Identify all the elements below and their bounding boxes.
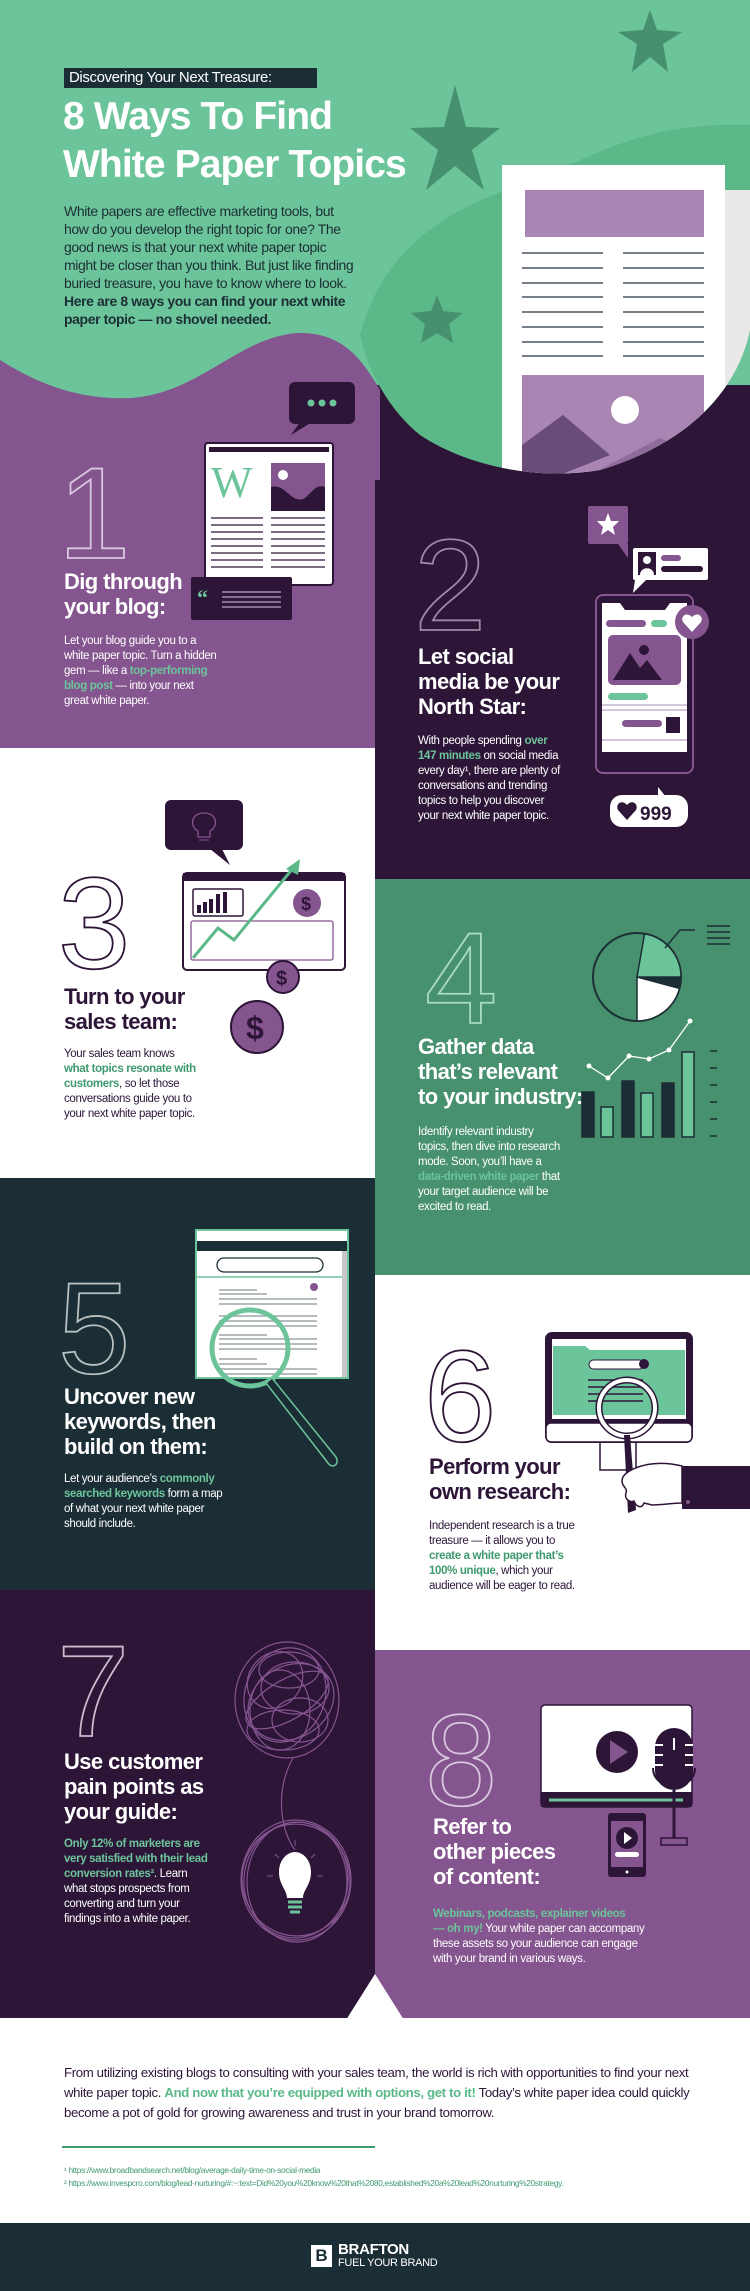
body 7 — [64, 1838, 208, 1925]
body 1: great white paper. — [64, 695, 149, 707]
illustration: blog page: W — [211, 458, 253, 507]
heading 4: that’s relevant — [418, 1059, 557, 1084]
footnotes: ¹ https://www.broadbandsearch.net/blog/average-daily-time-on-social-media — [64, 2165, 320, 2175]
body 7: conversion rates². Learn — [64, 1868, 187, 1880]
body 8: — oh my! Your white paper can accompany — [433, 1923, 644, 1935]
divider triangle — [347, 1974, 403, 2018]
body 4: mode. Soon, you’ll have a — [418, 1156, 542, 1168]
body 2: 147 minutes on social media — [418, 750, 558, 762]
intro text — [64, 203, 353, 327]
heading 1: Dig through — [64, 569, 182, 594]
heading 2: Let social — [418, 644, 513, 669]
body 7: converting and turn your — [64, 1898, 180, 1910]
body 6: 100% unique, which your — [429, 1565, 553, 1577]
heading 7: Use customer — [64, 1749, 202, 1774]
body 4: topics, then dive into research — [418, 1141, 560, 1153]
illustration: sales chart and coins — [165, 800, 346, 1054]
heading 5: build on them: — [64, 1434, 207, 1459]
body 7: findings into a white paper. — [64, 1913, 190, 1925]
body 7: very satisfied with their lead — [64, 1853, 208, 1865]
panel 6 background — [375, 1275, 750, 1650]
body 2: conversations and trending — [418, 780, 547, 792]
heading 3: Turn to your — [64, 984, 185, 1009]
logo: FUEL YOUR BRAND — [338, 2257, 437, 2269]
heading 3: sales team: — [64, 1009, 177, 1034]
body 1 — [64, 635, 216, 707]
panel 4 background — [375, 879, 750, 1275]
panel 3 background — [0, 748, 375, 1178]
heading 5: Uncover new — [64, 1384, 194, 1409]
heading 2 — [418, 644, 560, 719]
body 5: searched keywords form a map — [64, 1488, 222, 1500]
heading 1 — [64, 569, 182, 619]
heading 8: other pieces — [433, 1839, 555, 1864]
heading 4: to your industry: — [418, 1084, 583, 1109]
body 6: audience will be eager to read. — [429, 1580, 575, 1592]
intro text: White papers are effective marketing tools, but — [64, 203, 334, 219]
body 4: your target audience will be — [418, 1186, 548, 1198]
heading 7: pain points as — [64, 1774, 204, 1799]
star small — [411, 295, 463, 343]
illustration: sales chart and coins: $ — [246, 1010, 264, 1046]
body 3: Your sales team knows — [64, 1048, 174, 1060]
conclusion text: From utilizing existing blogs to consulting with your sales team, the world is rich with opportunities to find your next white paper topic. And now that you’re equipped with options, get to it! Today’s white paper idea could quickly become a pot of gold for growing awareness and trust in your brand tomorrow. — [64, 2065, 689, 2120]
illustration: blog page — [191, 382, 355, 620]
heading 7 — [64, 1749, 204, 1824]
body 8 — [433, 1908, 645, 1965]
heading 5: keywords, then — [64, 1409, 216, 1434]
title — [63, 95, 406, 186]
logo: BRAFTON — [338, 2241, 409, 2258]
star top right — [618, 10, 682, 72]
body 3: what topics resonate with — [64, 1063, 196, 1075]
body 8: Webinars, podcasts, explainer videos — [433, 1908, 625, 1920]
heading 6: Perform your — [429, 1454, 560, 1479]
heading 7: your guide: — [64, 1799, 177, 1824]
intro text: good news is that your next white paper topic — [64, 239, 326, 255]
body 1: Let your blog guide you to a — [64, 635, 196, 647]
panel 1 background — [0, 330, 375, 748]
body 3: customers, so let those — [64, 1078, 179, 1090]
hero background with waves, stars and paper — [0, 0, 750, 480]
body 4: excited to read. — [418, 1201, 491, 1213]
illustration: charts — [581, 925, 730, 1138]
logo — [311, 2241, 438, 2269]
body 1: gem — like a top-performing — [64, 665, 207, 677]
heading 2: North Star: — [418, 694, 526, 719]
body 1: blog post — into your next — [64, 680, 194, 692]
body 8: with your brand in various ways. — [433, 1953, 585, 1965]
tag line: Discovering Your Next Treasure: — [69, 69, 272, 86]
intro text: Here are 8 ways you can find your next white — [64, 293, 345, 309]
heading 8 — [433, 1814, 556, 1889]
body 3 — [64, 1048, 196, 1120]
footnotes: ² https://www.invespcro.com/blog/lead-nurturing/#:~:text=Did%20you%20know%20that%2080,established%20a%20lead%20nurturing%20strategy. — [64, 2178, 563, 2188]
title: White Paper Topics — [63, 143, 406, 186]
panel 8 background — [375, 1650, 750, 2018]
illustration: browser and magnifier — [195, 1229, 349, 1467]
body 3: conversations guide you to — [64, 1093, 192, 1105]
illustration: social phone: 999 — [640, 804, 672, 825]
body 2: topics to help you discover — [418, 795, 544, 807]
intro text: how do you develop the right topic for one? The — [64, 221, 341, 237]
body 6: Independent research is a true — [429, 1520, 574, 1532]
body 5 — [64, 1473, 222, 1530]
body 5: should include. — [64, 1518, 135, 1530]
heading 4: Gather data — [418, 1034, 534, 1059]
body 6 — [429, 1520, 575, 1592]
body 4: Identify relevant industry — [418, 1126, 534, 1138]
illustration: sales chart and coins: $ — [301, 894, 311, 914]
panel 2 background — [375, 330, 750, 879]
body 1: white paper topic. Turn a hidden — [64, 650, 216, 662]
body 2: your next white paper topic. — [418, 810, 549, 822]
intro text: might be closer than you think. But just like finding — [64, 257, 353, 273]
illustration: blog page: “ — [197, 585, 208, 610]
heading 4 — [418, 1034, 583, 1109]
body 7: Only 12% of marketers are — [64, 1838, 200, 1850]
chat bubble — [289, 382, 355, 435]
heading 6 — [429, 1454, 570, 1504]
body 2: With people spending over — [418, 735, 547, 747]
body 6: treasure — it allows you to — [429, 1535, 555, 1547]
panel 7 background — [0, 1590, 375, 2018]
body 5: of what your next white paper — [64, 1503, 204, 1515]
illustration: sales chart and coins: $ — [276, 968, 287, 990]
illustration: social phone — [588, 506, 709, 827]
title: 8 Ways To Find — [63, 95, 332, 138]
intro text: buried treasure, you have to know where to look. — [64, 275, 347, 291]
white paper — [502, 165, 750, 490]
intro text: paper topic — no shovel needed. — [64, 311, 271, 327]
heading 8: of content: — [433, 1864, 540, 1889]
heading 3 — [64, 984, 185, 1034]
footnotes — [64, 2165, 563, 2188]
illustration: tangled string and bulb — [234, 1641, 352, 1943]
illustration: monitor, magnifier and hand — [545, 1332, 750, 1513]
heading 2: media be your — [418, 669, 559, 694]
body 2: every day¹, there are plenty of — [418, 765, 560, 777]
body 4 — [418, 1126, 560, 1213]
heading 1: your blog: — [64, 594, 166, 619]
body 8: these assets so your audience can engage — [433, 1938, 638, 1950]
body 3: your next white paper topic. — [64, 1108, 195, 1120]
body 4: data-driven white paper that — [418, 1171, 560, 1183]
body 5: Let your audience’s commonly — [64, 1473, 214, 1485]
star big — [410, 85, 500, 190]
panel 5 background — [0, 1178, 375, 1590]
footer bar with logo — [0, 2223, 750, 2291]
logo: B — [315, 2246, 328, 2265]
body 2 — [418, 735, 560, 822]
body 6: create a white paper that’s — [429, 1550, 564, 1562]
tag line — [64, 68, 317, 88]
body 7: what stops prospects from — [64, 1883, 189, 1895]
heading 5 — [64, 1384, 216, 1459]
heading 6: own research: — [429, 1479, 570, 1504]
illustration: video, mic, phone — [540, 1704, 696, 1877]
heading 8: Refer to — [433, 1814, 511, 1839]
